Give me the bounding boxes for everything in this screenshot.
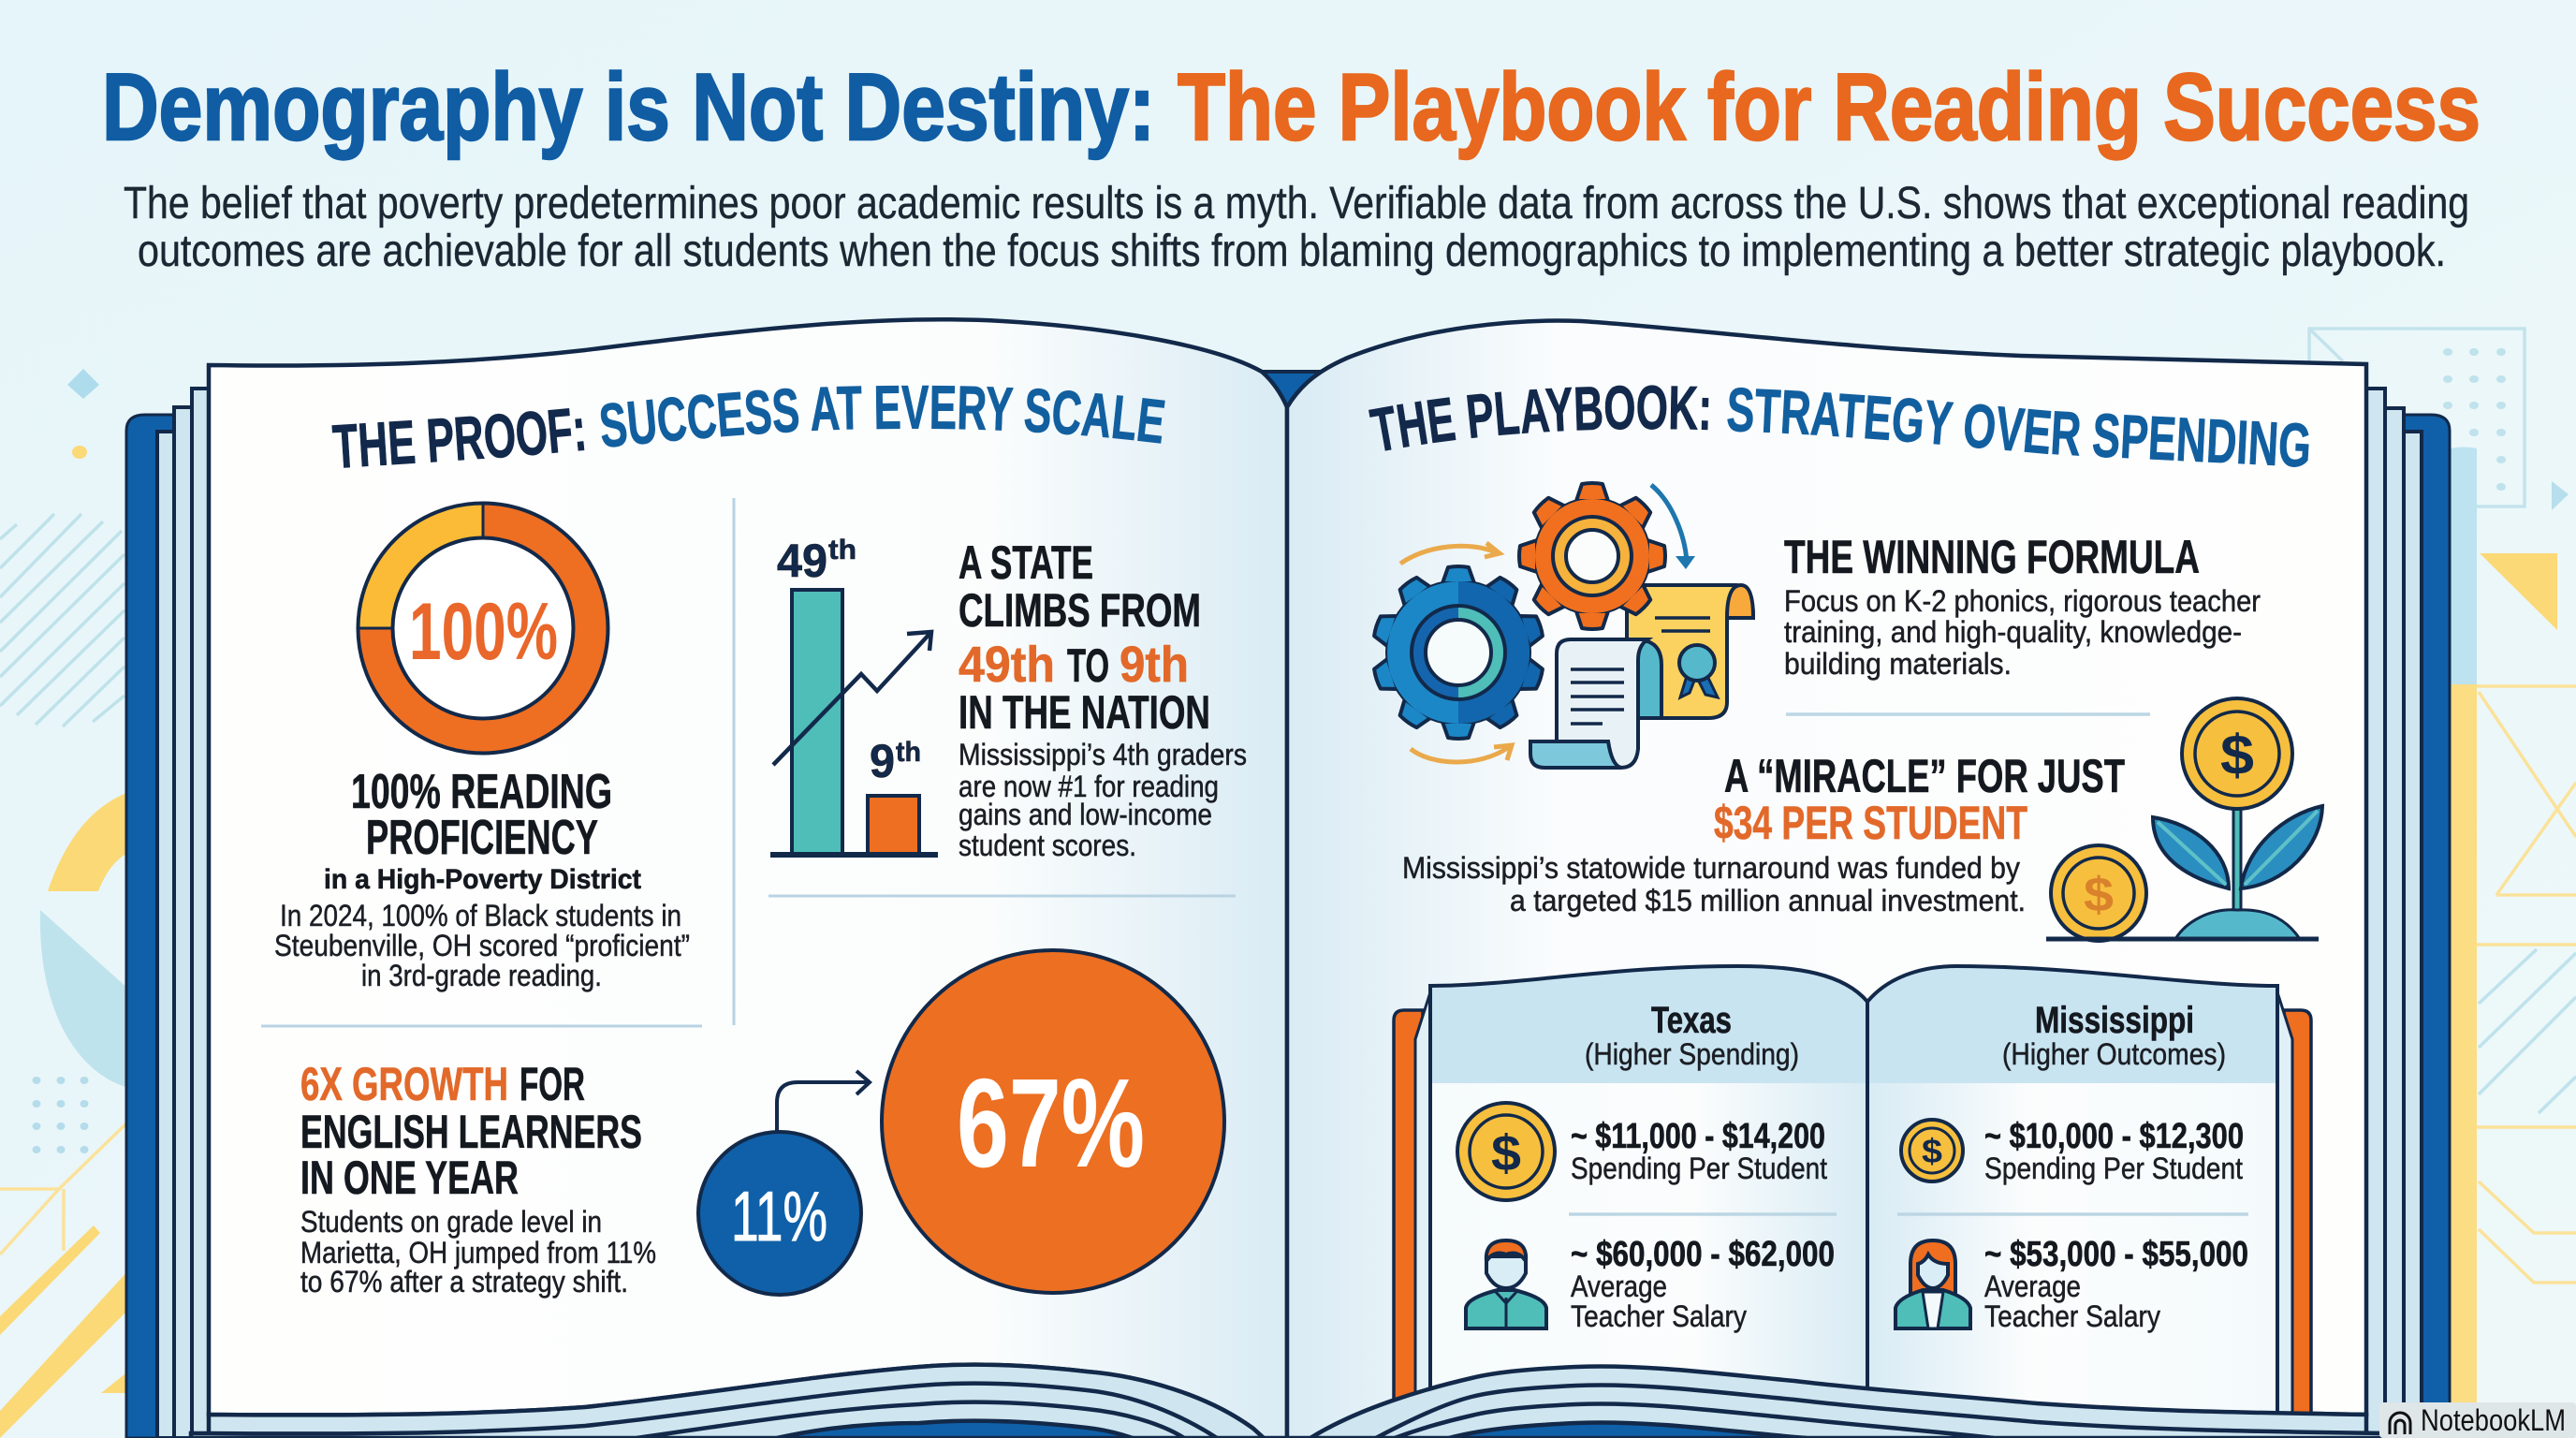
- bubble chart: 11% to 67%: [698, 950, 1224, 1295]
- heading: the playbook: [1368, 385, 2308, 467]
- column: mississippi: Average: [1984, 1269, 2081, 1303]
- column: mississippi: ~ $10,000 - $12,300: [1984, 1117, 2244, 1156]
- column: mississippi: [1895, 1000, 2248, 1333]
- bar chart: 49th to 9th: 49: [777, 535, 827, 587]
- left page: [209, 319, 1287, 1438]
- icon: money plant: $: [2084, 868, 2114, 922]
- icon: coin: $: [1491, 1125, 1521, 1181]
- icon: blue gear: [1371, 566, 1545, 739]
- bubble chart: 11% to 67%: 67%: [957, 1052, 1145, 1194]
- icon: certificate scroll: [1627, 585, 1753, 718]
- text block: a state climbs: TO: [1067, 639, 1109, 692]
- bar chart: 49th to 9th: th: [828, 535, 856, 565]
- column: texas: ~ $60,000 - $62,000: [1571, 1235, 1835, 1274]
- book cover: [126, 404, 2450, 1438]
- comparison book covers: [1394, 1010, 2311, 1438]
- column: texas: Spending Per Student: [1571, 1152, 1827, 1185]
- text block: a state climbs: student scores.: [959, 829, 1136, 862]
- column: mississippi: Mississippi: [2035, 1000, 2194, 1041]
- bar chart: 49th to 9th: [770, 535, 938, 855]
- text block: 6x growth: FOR: [520, 1058, 585, 1110]
- heading: the proof: SUCCESS AT EVERY SCALE: [601, 386, 1165, 448]
- title: [102, 55, 2481, 160]
- donut chart: 100%: 100%: [409, 587, 558, 677]
- icon: orange arrows: [1400, 543, 1512, 762]
- icon: male teacher: [1466, 1240, 1546, 1328]
- text block: a state climbs: CLIMBS FROM: [959, 584, 1201, 637]
- page stack: left: [157, 389, 242, 1438]
- page edges: [1415, 992, 2292, 1438]
- heading: the playbook: THE PLAYBOOK:: [1368, 385, 1709, 451]
- text block: a state climbs: A STATE: [959, 536, 1093, 589]
- decorative background shapes: left: [0, 369, 129, 1438]
- text block: a state climbs: are now #1 for reading: [959, 770, 1219, 803]
- heading: the proof: [331, 386, 1165, 468]
- icon: gears and scrolls: [1371, 483, 1753, 768]
- icon: blue arrow: [1651, 485, 1687, 562]
- text block: a state climbs: IN THE NATION: [959, 686, 1210, 739]
- text block: 100% reading proficiency: PROFICIENCY: [366, 811, 598, 865]
- column: texas: Average: [1571, 1269, 1667, 1303]
- text block: the winning formula: Focus on K-2 phonics, rigorous teacher: [1784, 584, 2261, 618]
- text block: the winning formula: THE WINNING FORMULA: [1784, 531, 2200, 583]
- text block: miracle for $34 per student: $34 PER STUDENT: [1714, 797, 2027, 849]
- comparison book pages: [1430, 966, 2277, 1432]
- column: mississippi: Teacher Salary: [1984, 1299, 2160, 1333]
- text block: 100% reading proficiency: [274, 765, 690, 992]
- bar chart: 49th to 9th: 9: [870, 735, 895, 787]
- column: mississippi: ~ $53,000 - $55,000: [1984, 1235, 2248, 1274]
- comparison book header band: [1430, 966, 2277, 1083]
- spine top: [1254, 372, 1320, 409]
- right column page shading: [1867, 1083, 2277, 1432]
- title: Demography is Not Destiny:: [102, 55, 1155, 160]
- comparison book: [1394, 966, 2311, 1438]
- right page: [1287, 320, 2366, 1438]
- left column page shading: [1430, 1083, 1867, 1432]
- decorative background shapes: right: [2309, 329, 2576, 1438]
- icon: money plant: $: [2220, 724, 2254, 786]
- text block: a state climbs: 9th: [1120, 637, 1189, 693]
- heading: the proof: THE PROOF:: [331, 408, 584, 468]
- text block: a state climbs: gains and low-income: [959, 798, 1212, 831]
- text block: 100% reading proficiency: in a High-Poverty District: [324, 864, 641, 895]
- icon: female teacher: [1895, 1240, 1970, 1328]
- column: texas: [1457, 1000, 1837, 1333]
- text block: 6x growth: to 67% after a strategy shift.: [300, 1265, 628, 1299]
- text block: 100% reading proficiency: In 2024, 100% of Black students in: [280, 899, 681, 932]
- text block: the winning formula: [1784, 531, 2261, 681]
- donut chart: 100%: [358, 504, 608, 753]
- icon: document scroll: [1530, 639, 1661, 768]
- book bottom page edges: [191, 1365, 2385, 1438]
- bubble chart: 11% to 67%: 11%: [731, 1177, 827, 1255]
- heading: the playbook: STRATEGY OVER SPENDING: [1727, 388, 2308, 467]
- text block: 100% reading proficiency: Steubenville, OH scored “proficient”: [274, 929, 690, 962]
- text block: 6x growth: Students on grade level in: [300, 1205, 602, 1239]
- text block: a state climbs: 49th: [959, 637, 1055, 693]
- text block: miracle for $34 per student: [1402, 750, 2125, 917]
- column: texas: Texas: [1651, 1000, 1732, 1041]
- text block: a state climbs: [959, 536, 1247, 862]
- column: mississippi: (Higher Outcomes): [2002, 1037, 2226, 1071]
- page stack: right: [2340, 389, 2422, 1438]
- column: texas: Teacher Salary: [1571, 1299, 1747, 1333]
- text block: 6x growth: [300, 1058, 656, 1299]
- text block: 100% reading proficiency: 100% READING: [351, 765, 612, 819]
- icon: money plant: [2046, 698, 2322, 941]
- text block: 6x growth: 6X GROWTH: [300, 1058, 508, 1110]
- text block: miracle for $34 per student: a targeted $15 million annual investment.: [1510, 884, 2026, 917]
- column: texas: (Higher Spending): [1585, 1037, 1799, 1071]
- text block: miracle for $34 per student: A “MIRACLE” FOR JUST: [1724, 750, 2125, 802]
- text block: 100% reading proficiency: in 3rd-grade reading.: [361, 959, 602, 992]
- column: mississippi: Spending Per Student: [1984, 1152, 2243, 1185]
- open book: [126, 319, 2450, 1438]
- icon: coin: [1901, 1120, 1963, 1181]
- text block: 6x growth: ENGLISH LEARNERS: [300, 1106, 642, 1158]
- icon: coin: [1457, 1103, 1555, 1200]
- text block: the winning formula: building materials.: [1784, 647, 2012, 681]
- text block: 6x growth: IN ONE YEAR: [300, 1152, 519, 1204]
- column: texas: ~ $11,000 - $14,200: [1571, 1117, 1825, 1156]
- bar chart: 49th to 9th: th: [896, 737, 921, 768]
- text block: miracle for $34 per student: Mississippi’s statowide turnaround was funded by: [1402, 851, 2020, 885]
- text block: 6x growth: Marietta, OH jumped from 11%: [300, 1236, 656, 1269]
- text block: a state climbs: Mississippi’s 4th graders: [959, 738, 1247, 771]
- icon: coin: $: [1922, 1132, 1942, 1170]
- icon: orange gear: [1519, 483, 1665, 629]
- text block: the winning formula: training, and high-quality, knowledge-: [1784, 615, 2242, 649]
- subtitle text block: [124, 179, 2469, 276]
